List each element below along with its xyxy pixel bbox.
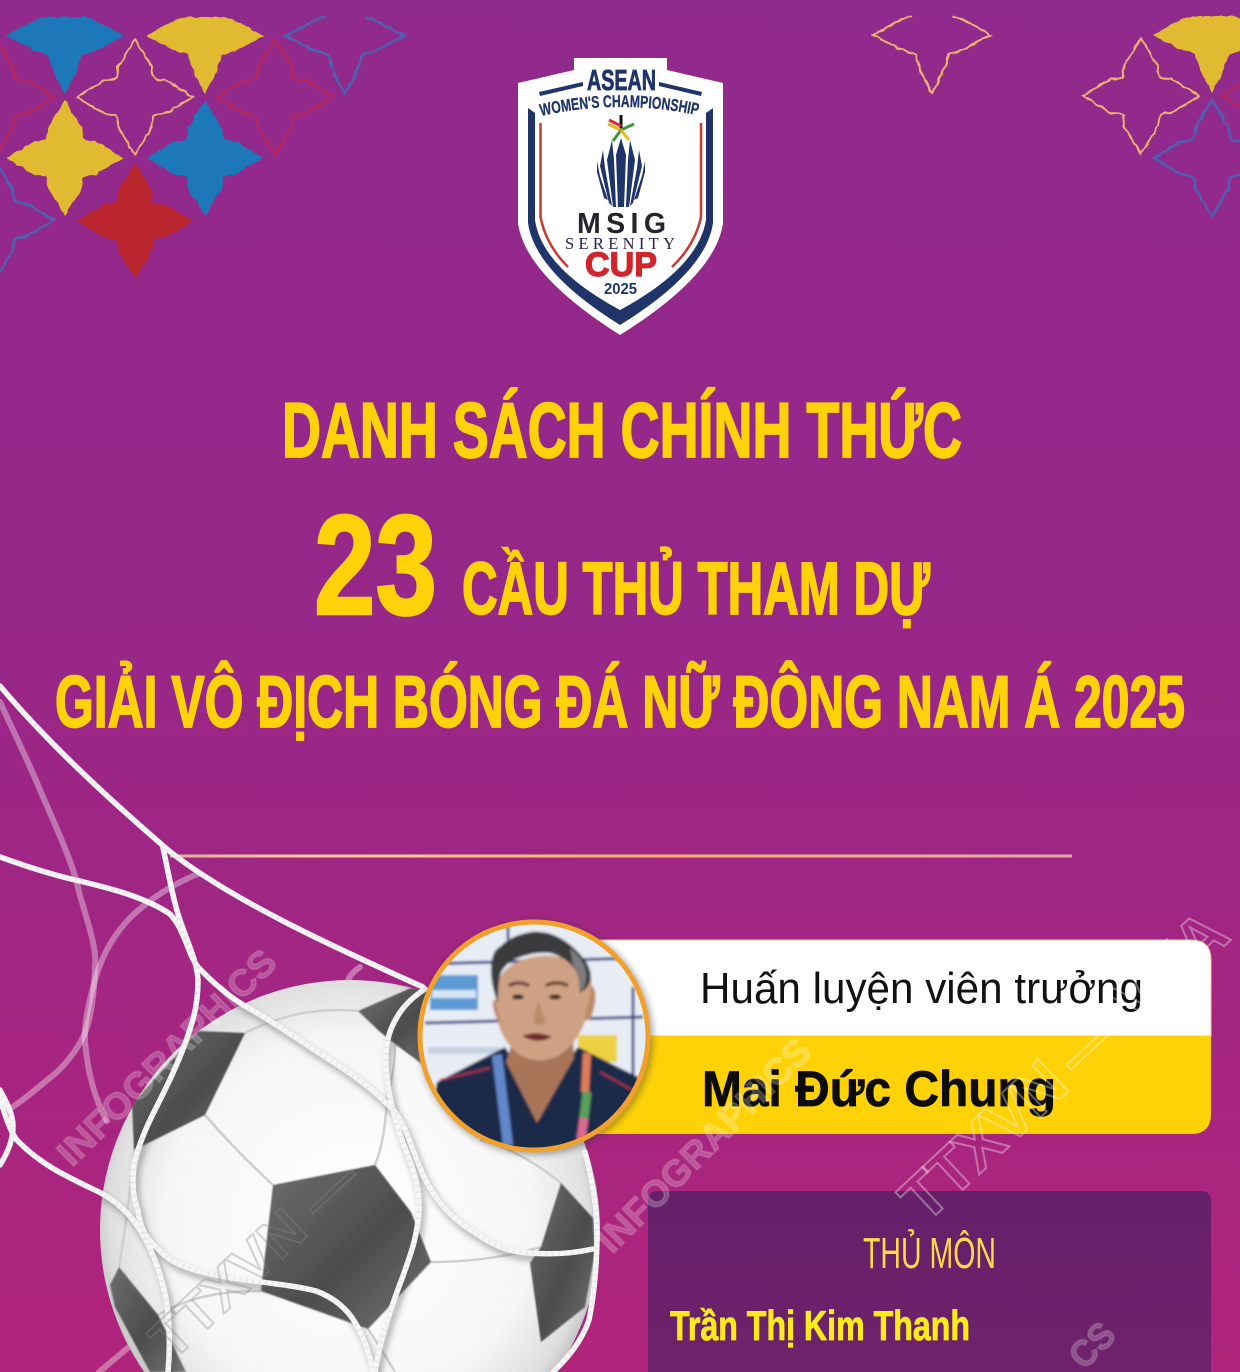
watermark: TTXVN - VNA	[137, 896, 1240, 1371]
coach neck	[506, 1040, 574, 1123]
title: CẦU THỦ THAM DỰ	[462, 547, 930, 630]
logo: ASEAN Women's Championship MSIG Serenity Cup 2025 shield: WOMEN'S CHAMPIONSHIP	[538, 95, 700, 116]
logo: ASEAN Women's Championship MSIG Serenity Cup 2025 shield: SERENITY	[565, 234, 675, 253]
logo: ASEAN Women's Championship MSIG Serenity Cup 2025 shield	[518, 58, 723, 335]
coach lanyards	[497, 1055, 508, 1145]
logo: ASEAN Women's Championship MSIG Serenity Cup 2025 shield: CUP	[585, 246, 657, 284]
coach photo	[415, 920, 655, 1160]
watermark: INFOGRAPHICS: INFOGRAPHICS	[49, 941, 284, 1174]
coach brows, eyes, nose, mouth	[510, 983, 567, 985]
watermark: TTXVN - VNA: TTXVN — VNA	[885, 896, 1240, 1235]
coach card	[590, 940, 1211, 1134]
logo fan emblem	[597, 138, 645, 207]
panel: goalkeepers	[648, 1191, 1211, 1372]
panel heading: THỦ MÔN	[863, 1227, 996, 1278]
football net	[0, 686, 597, 1372]
soccer ball	[100, 980, 600, 1372]
coach shirt	[434, 1046, 638, 1148]
title: 23	[314, 486, 437, 645]
watermark: INFOGRAPHICS: INFOGRAPHICS	[589, 1030, 819, 1261]
faded background net	[0, 702, 360, 1372]
watermark: INFOGRAPHICS	[49, 941, 1124, 1372]
coach hair	[491, 932, 591, 1003]
logo: ASEAN Women's Championship MSIG Serenity Cup 2025 shield: 2025	[604, 281, 637, 298]
title: DANH SÁCH CHÍNH THỨC	[282, 386, 962, 474]
watermark: TTXVN - VNA: TTXVN —	[137, 1146, 372, 1371]
player name: Trần Thị Kim Thanh	[670, 1302, 970, 1349]
decorative stars: top right	[873, 16, 1240, 216]
logo: ASEAN Women's Championship MSIG Serenity Cup 2025 shield: MSIG	[577, 208, 666, 240]
coach name: Mai Đức Chung	[702, 1061, 1056, 1117]
net shadow on ball	[102, 984, 600, 1372]
logo: ASEAN Women's Championship MSIG Serenity Cup 2025 shield: ASEAN	[587, 65, 656, 97]
divider line	[170, 854, 1072, 858]
coach role: Huấn luyện viên trưởng	[700, 964, 1143, 1013]
ball patches	[110, 988, 595, 1372]
ball seams	[119, 1010, 561, 1372]
coach face	[495, 956, 592, 1060]
logo star emblem	[608, 115, 634, 141]
title	[55, 386, 1185, 743]
decorative stars: top left	[0, 17, 404, 279]
